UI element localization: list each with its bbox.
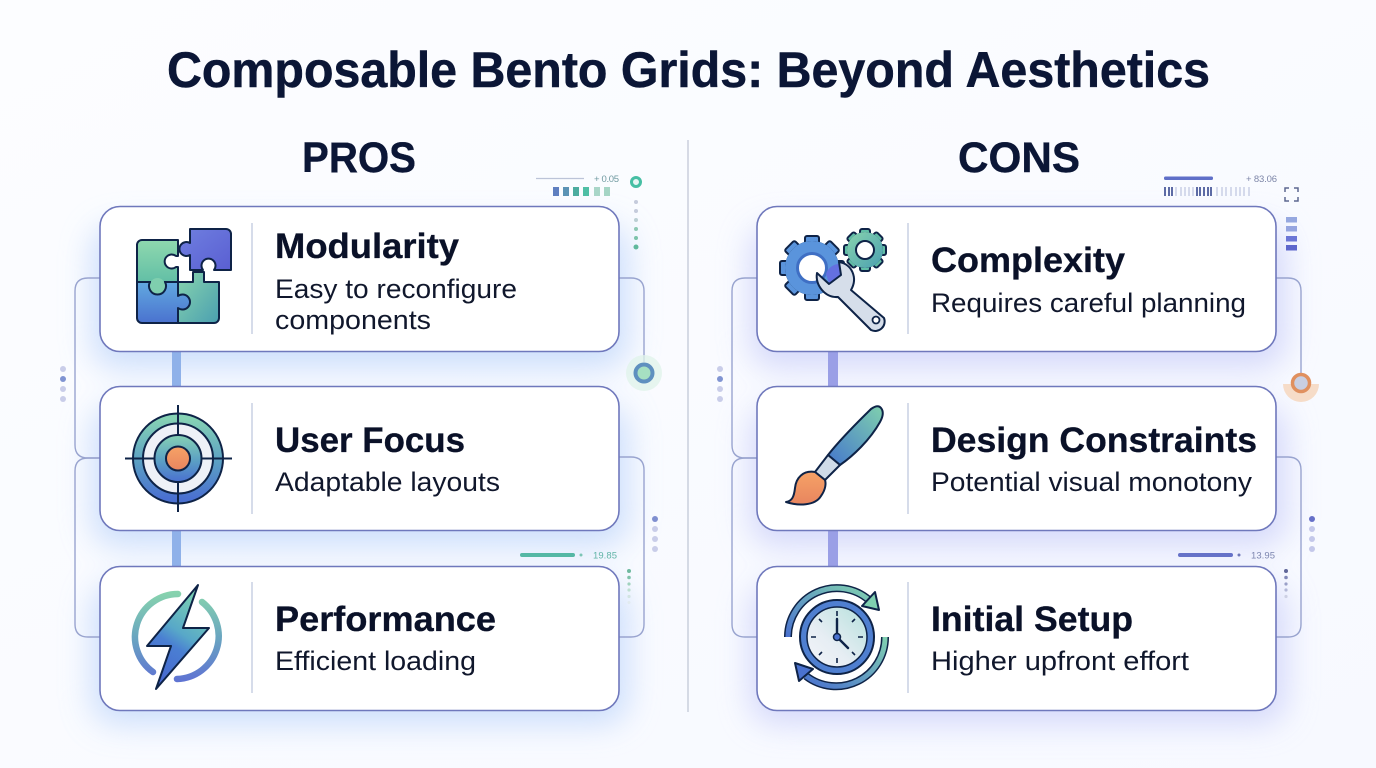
icon: lightning bolt (135, 585, 219, 689)
card: initial setup (757, 566, 1276, 710)
card: complexity (757, 206, 1276, 352)
heading: initial setup: Initial Setup (931, 600, 1133, 639)
card: design constraints (757, 386, 1276, 530)
decoration: lower readout (520, 550, 631, 604)
decoration: node marker (1283, 374, 1319, 402)
soft card glow: cons (750, 226, 1286, 724)
description: modularity: Easy to reconfigure (275, 274, 517, 304)
icon: puzzle pieces (137, 229, 231, 323)
description: design constraints: Potential visual monotony (931, 467, 1253, 497)
card: user focus (100, 386, 619, 530)
heading: user focus: User Focus (275, 421, 465, 460)
icon: paint brush (786, 406, 883, 504)
icon: target (125, 405, 232, 512)
title: Composable Bento Grids: Beyond Aesthetics (167, 42, 1210, 98)
description: user focus: Adaptable layouts (275, 467, 500, 497)
decoration: lower readout: 13.95 (1251, 550, 1275, 562)
description: modularity: components (275, 305, 431, 335)
card: performance (100, 566, 619, 710)
decoration: focus bracket icon (1285, 188, 1298, 201)
decoration: top readout (536, 174, 619, 196)
cons vertical links between cards (828, 352, 838, 566)
decoration: right dots (1309, 516, 1315, 552)
decoration: top readout: + 0.05 (594, 174, 619, 185)
cons connector brackets (732, 278, 1301, 637)
heading: modularity: Modularity (275, 227, 460, 266)
center divider line (687, 140, 689, 712)
card: modularity (100, 206, 619, 352)
decoration: left dots (717, 366, 723, 402)
description: performance: Efficient loading (275, 646, 476, 676)
heading: performance: Performance (275, 600, 496, 639)
decoration: stacked bars (1286, 217, 1297, 250)
pros column (60, 134, 662, 710)
decoration: ring marker and dots (632, 178, 640, 250)
decoration: left dots (60, 366, 66, 402)
soft card glow: pros (92, 226, 628, 724)
decoration: lower readout: 19.85 (593, 550, 617, 562)
heading: design constraints: Design Constraints (931, 421, 1257, 460)
decoration: top readout: + 83.06 (1246, 174, 1277, 185)
cons heading: CONS (958, 134, 1080, 182)
pros connector brackets (75, 278, 644, 637)
decoration: lower readout (1178, 550, 1288, 598)
description: complexity: Requires careful planning (931, 288, 1246, 318)
decoration: top readout (1164, 174, 1277, 196)
pros vertical links between cards (172, 352, 181, 566)
icon: clock with cycle arrows (788, 588, 885, 686)
decoration: right dots (652, 516, 658, 552)
decoration: node marker (626, 355, 662, 391)
description: initial setup: Higher upfront effort (931, 646, 1190, 676)
icon: gears and wrench (780, 229, 886, 331)
pros heading: PROS (302, 134, 416, 182)
heading: complexity: Complexity (931, 241, 1126, 280)
cons column (717, 134, 1319, 710)
